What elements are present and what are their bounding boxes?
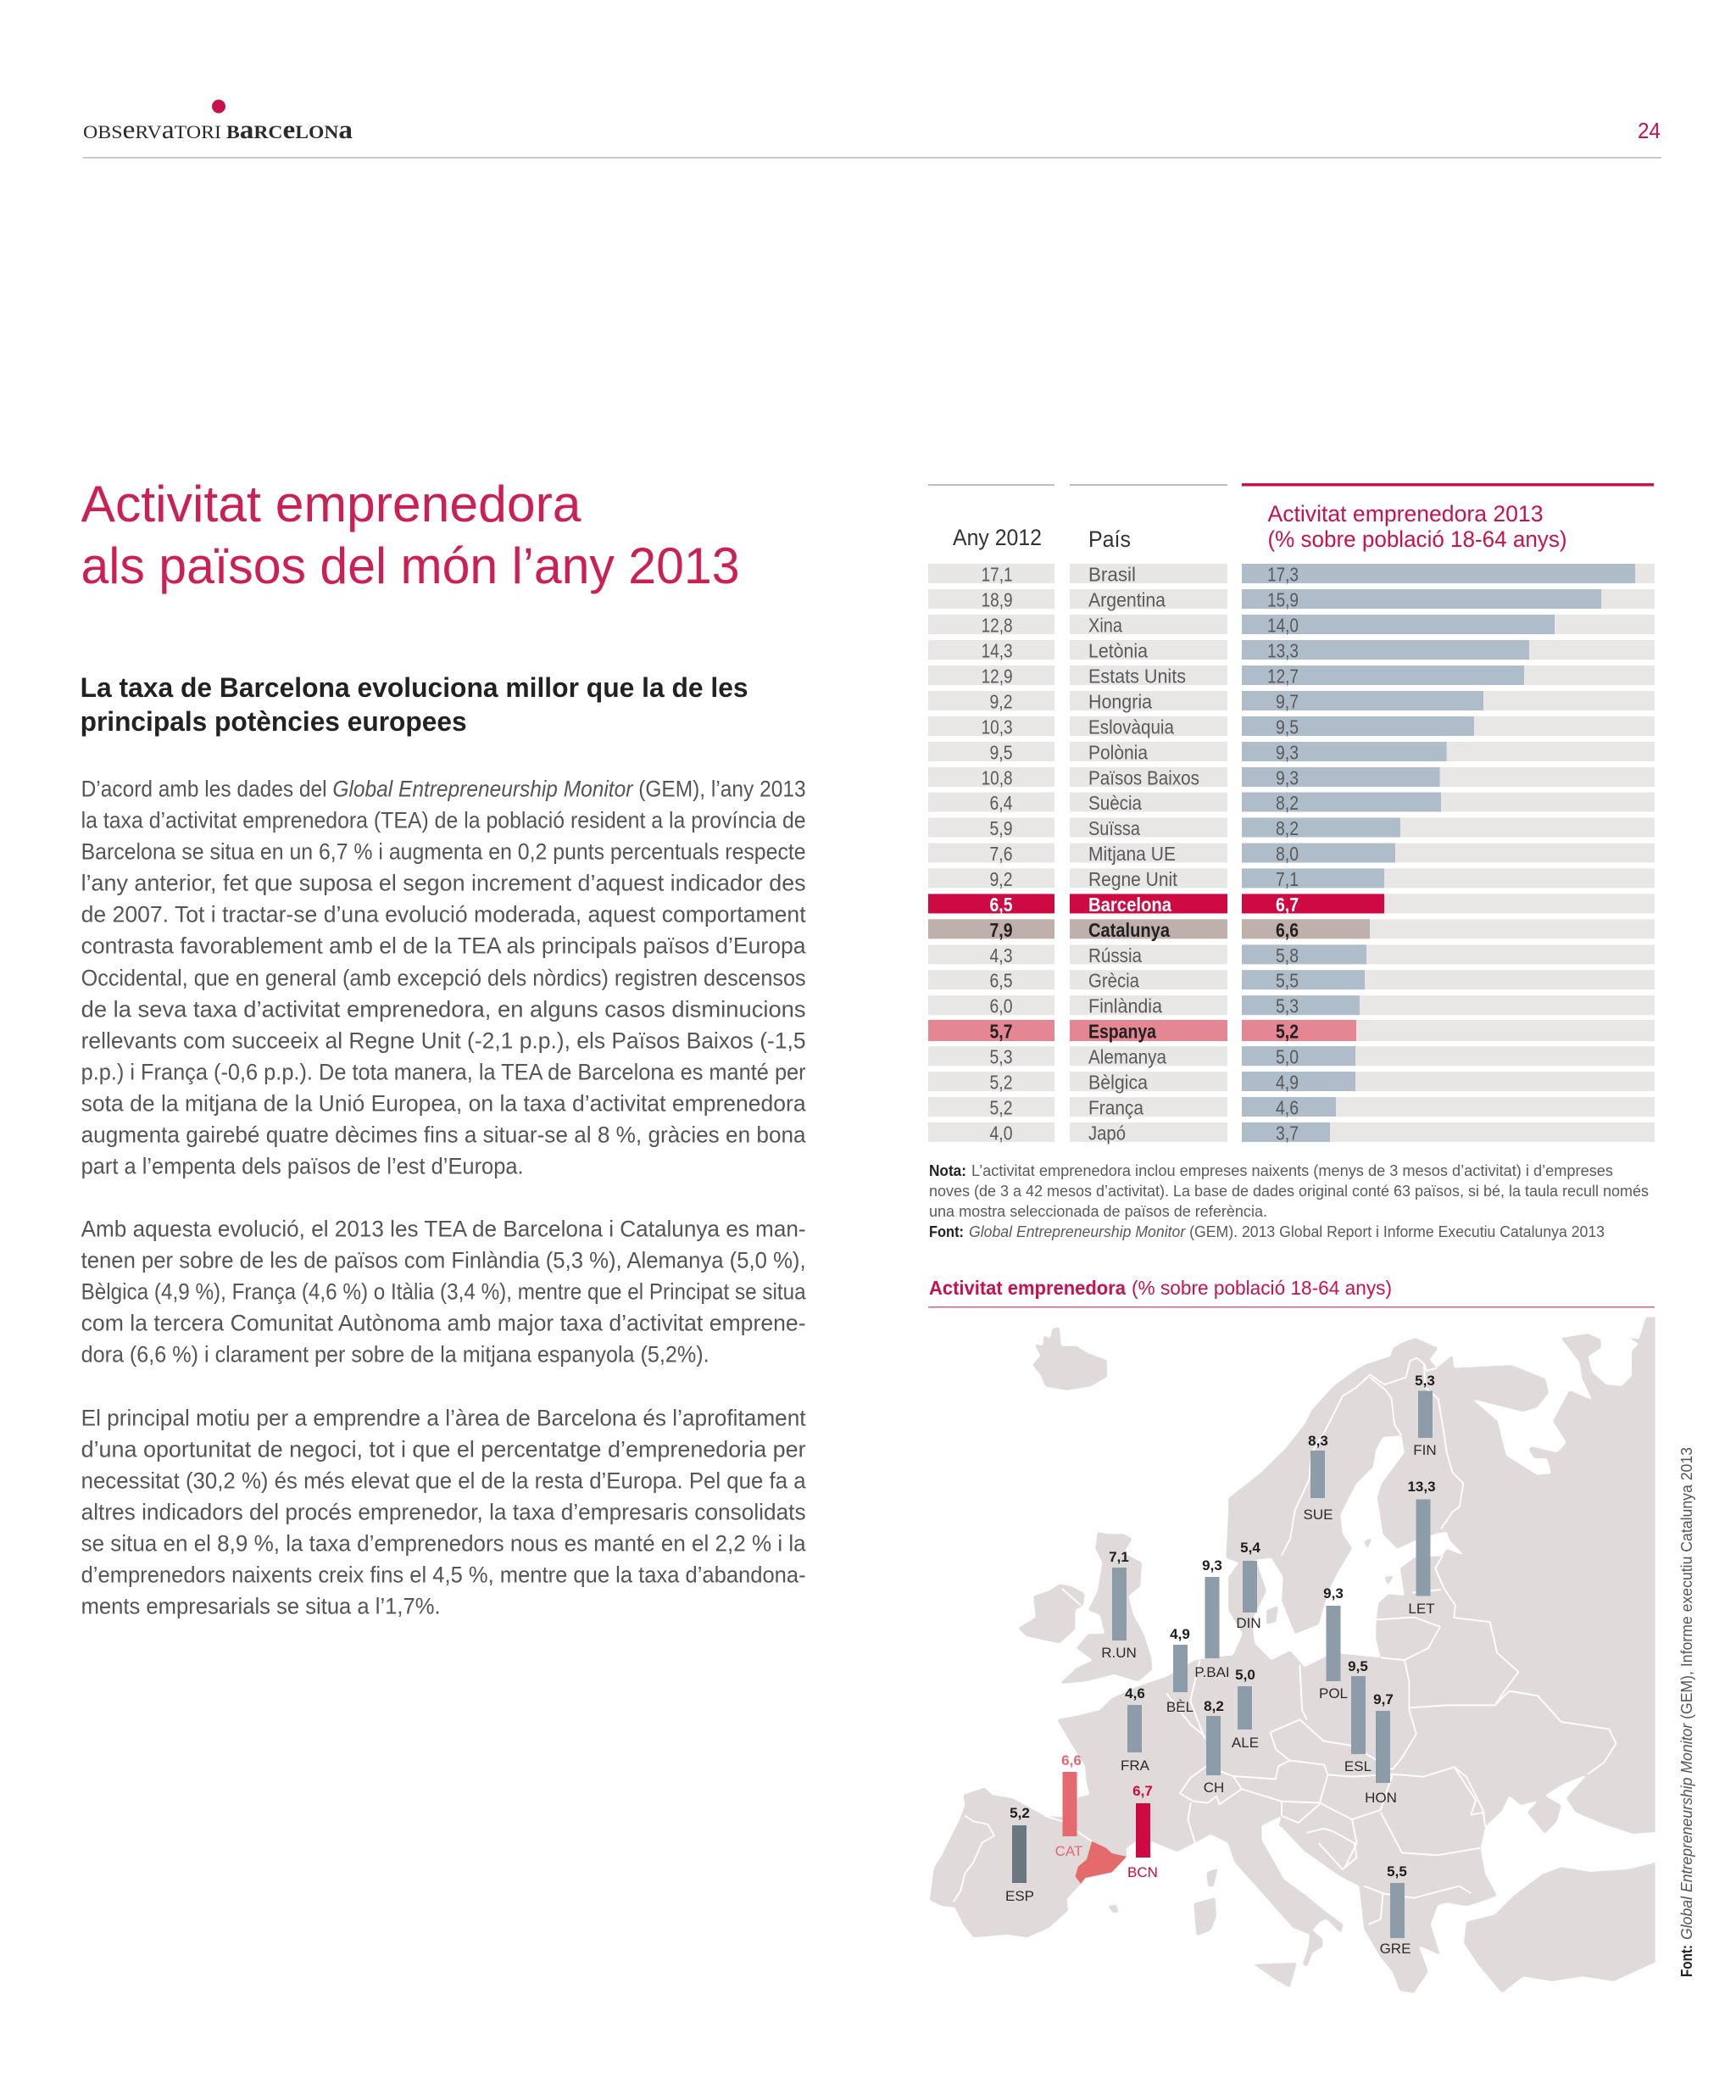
- row: Estats Units: Estats Units: [1088, 665, 1186, 687]
- bar: Espanya: ESP: [1005, 1888, 1034, 1904]
- vertical source note: Font:: [1678, 1945, 1695, 1977]
- bar: França: 4,6: [1125, 1685, 1145, 1702]
- row: Mitjana UE: Mitjana UE: [1088, 843, 1176, 865]
- title: Activitat emprenedora: [81, 476, 581, 532]
- row: Espanya (highlight): [928, 1020, 1655, 1043]
- body text: augmenta gairebé quatre dècimes fins a situar-se al 8 %, gràcies en bona: [81, 1122, 807, 1148]
- row: Alemanya: 5,0: [1276, 1046, 1299, 1068]
- row: Estats Units: 12,9: [982, 665, 1013, 687]
- bar: Dinamarca: DIN: [1236, 1615, 1261, 1631]
- row: Rússia: [928, 944, 1655, 966]
- row: Letònia: 13,3: [1267, 639, 1299, 661]
- logo: Observatori Barcelona: [83, 100, 353, 144]
- body text: se situa en el 8,9 %, la taxa d’emprenedors nous es manté en el 2,2 % i la: [81, 1531, 807, 1557]
- bar: Alemanya: 5,0: [1235, 1667, 1255, 1683]
- bar: Regne Unit: 7,1: [1109, 1549, 1129, 1565]
- row: Xina: 14,0: [1267, 614, 1299, 636]
- bar: Països Baixos: [1194, 1557, 1230, 1680]
- row: Xina: Xina: [1088, 614, 1122, 636]
- bar: Suïssa: [1204, 1698, 1224, 1796]
- row: Països Baixos: [928, 766, 1655, 788]
- bar: Catalunya: [1055, 1752, 1082, 1859]
- row: Suècia: Suècia: [1088, 792, 1142, 814]
- title: [81, 476, 739, 594]
- row: Mitjana UE: [928, 843, 1655, 865]
- bar: Bèlgica: BÈL: [1166, 1699, 1194, 1715]
- bar: Països Baixos: P.BAI: [1194, 1664, 1230, 1680]
- row: Finlàndia: [928, 995, 1655, 1017]
- row: Hongria: 9,2: [990, 690, 1012, 712]
- row: Bèlgica: 4,9: [1276, 1072, 1299, 1094]
- title: als països del món l’any 2013: [81, 538, 739, 594]
- logo: Observatori Barcelona: BaRCeLONa: [226, 114, 353, 144]
- page number: 24: [1638, 118, 1661, 143]
- row: Grècia: 5,5: [1276, 970, 1299, 992]
- row: Estats Units: 12,7: [1267, 665, 1299, 687]
- row: Polònia: Polònia: [1088, 741, 1148, 763]
- subheading: [81, 672, 748, 737]
- row: França: 5,2: [990, 1097, 1012, 1119]
- bar: Hongria: HON: [1365, 1790, 1397, 1806]
- bar: Regne Unit: R.UN: [1101, 1645, 1137, 1661]
- note and source: Font:: [929, 1223, 964, 1240]
- row: Xina: 12,8: [982, 614, 1013, 636]
- row: Barcelona (highlight): 6,7: [1276, 894, 1299, 916]
- bar: Barcelona: [1127, 1783, 1158, 1880]
- bar: Suïssa: CH: [1204, 1780, 1224, 1796]
- row: Països Baixos: 9,3: [1276, 766, 1299, 788]
- body text: la taxa d’activitat emprenedora (TEA) de la població resident a la província de: [81, 807, 806, 833]
- row: Letònia: Letònia: [1088, 639, 1148, 661]
- row: Japó: 3,7: [1276, 1122, 1299, 1144]
- map heading: (% sobre població 18-64 anys): [1132, 1277, 1392, 1299]
- bar: Regne Unit: [1101, 1549, 1137, 1661]
- row: Suïssa: Suïssa: [1088, 817, 1140, 839]
- bar: Letònia: [1407, 1479, 1436, 1617]
- bar: Alemanya: ALE: [1232, 1735, 1259, 1751]
- body text: de 2007. Tot i tractar-se d’una evolució moderada, aquest comportament: [81, 902, 806, 927]
- row: Barcelona (highlight): [928, 894, 1655, 916]
- body text: El principal motiu per a emprendre a l’àrea de Barcelona és l’aprofitament: [81, 1406, 806, 1431]
- bar: Suècia: [1304, 1433, 1333, 1523]
- table: data rows: [928, 563, 1655, 1144]
- row: Mitjana UE: 7,6: [990, 843, 1012, 865]
- row: Espanya (highlight): Espanya: [1088, 1021, 1156, 1043]
- body text: com la tercera Comunitat Autònoma amb major taxa d’activitat emprene-: [81, 1311, 806, 1336]
- row: Finlàndia: 6,0: [990, 995, 1012, 1017]
- row: Finlàndia: 5,3: [1276, 995, 1299, 1017]
- row: Japó: Japó: [1088, 1122, 1126, 1144]
- bar: França: FRA: [1121, 1757, 1150, 1774]
- row: Brasil: Brasil: [1088, 563, 1136, 585]
- map heading: [928, 1277, 1655, 1307]
- bar: Finlàndia: 5,3: [1415, 1373, 1435, 1389]
- bar: Letònia: LET: [1408, 1601, 1435, 1617]
- row: Suècia: 6,4: [990, 792, 1013, 814]
- table headers: País: [1088, 526, 1131, 552]
- row: Catalunya (highlight): 7,9: [990, 919, 1012, 941]
- subheading: principals potències europees: [81, 706, 467, 737]
- body text: d’emprenedors naixents creix fins el 4,5 %, mentre que la taxa d’abandona-: [81, 1562, 806, 1587]
- row: Japó: 4,0: [990, 1122, 1012, 1144]
- logo: Observatori Barcelona: OBSeRVaTORI: [83, 114, 221, 144]
- body text: Barcelona se situa en un 6,7 % i augmenta en 0,2 punts percentuals respecte: [81, 839, 806, 865]
- bar: Eslovàquia: ESL: [1344, 1758, 1372, 1774]
- bar: Bèlgica: 4,9: [1170, 1626, 1190, 1642]
- row: Regne Unit: 7,1: [1276, 868, 1299, 890]
- row: Brasil: 17,1: [982, 563, 1013, 585]
- bar: Catalunya: CAT: [1055, 1843, 1082, 1859]
- bar: França: [1121, 1685, 1150, 1774]
- body text: l’any anterior, fet que suposa el segon increment d’aquest indicador des: [81, 870, 806, 895]
- row: Suècia: 8,2: [1276, 792, 1299, 814]
- row: Polònia: 9,5: [990, 741, 1012, 763]
- body text: tenen per sobre de les de països com Finlàndia (5,3 %), Alemanya (5,0 %),: [81, 1248, 806, 1273]
- body text: rellevants com succeeix al Regne Unit (-2,1 p.p.), els Països Baixos (-1,5: [81, 1028, 806, 1053]
- row: Alemanya: [928, 1046, 1655, 1068]
- body text: Bèlgica (4,9 %), França (4,6 %) o Itàlia (3,4 %), mentre que el Principat se situa: [81, 1278, 806, 1304]
- body text: p.p.) i França (-0,6 p.p.). De tota manera, la TEA de Barcelona es manté per: [81, 1060, 806, 1085]
- bar: Finlàndia: [1413, 1373, 1437, 1458]
- row: Bèlgica: 5,2: [990, 1072, 1012, 1094]
- note and source: una mostra seleccionada de països de referència.: [929, 1203, 1267, 1220]
- row: Regne Unit: 9,2: [990, 868, 1012, 890]
- body text: Amb aquesta evolució, el 2013 les TEA de Barcelona i Catalunya es man-: [81, 1216, 806, 1241]
- row: Grècia: Grècia: [1088, 970, 1139, 992]
- row: Eslovàquia: 10,3: [982, 716, 1013, 738]
- row: Japó: [928, 1122, 1655, 1144]
- bar: Eslovàquia: 9,5: [1348, 1658, 1368, 1674]
- row: Espanya (highlight): 5,7: [990, 1021, 1012, 1043]
- bar: Hongria: 9,7: [1373, 1691, 1394, 1707]
- row: Polònia: [928, 741, 1655, 763]
- body text: part a l’empenta dels països de l’est d’Europa.: [81, 1153, 524, 1178]
- body text: altres indicadors del procés emprenedor, la taxa d’empresaris consolidats: [81, 1499, 806, 1524]
- bar: Bèlgica: [1166, 1626, 1194, 1715]
- row: Letònia: 14,3: [982, 639, 1013, 661]
- body text: de la seva taxa d’activitat emprenedora, en alguns casos disminucions: [81, 997, 806, 1022]
- row: Xina: [928, 614, 1655, 636]
- bar: Barcelona: BCN: [1127, 1864, 1158, 1880]
- bar: Barcelona: 6,7: [1132, 1783, 1153, 1799]
- row: Barcelona (highlight): Barcelona: [1088, 894, 1171, 916]
- bar: Suïssa: 8,2: [1204, 1698, 1224, 1714]
- map region: Catalonia: [1075, 1841, 1127, 1884]
- row: Rússia: Rússia: [1088, 944, 1142, 966]
- body text: necessitat (30,2 %) és més elevat que el de la resta d’Europa. Pel que fa a: [81, 1468, 807, 1494]
- note and source: noves (de 3 a 42 mesos d’activitat). La base de dades original conté 63 països, si bé, la taula recull només: [929, 1183, 1649, 1200]
- body text: [81, 777, 807, 1619]
- row: Grècia: [928, 970, 1655, 992]
- bar: Grècia: GRE: [1380, 1941, 1410, 1957]
- row: Suècia: [928, 792, 1655, 814]
- bar: Espanya: [1005, 1805, 1034, 1904]
- bar: Grècia: 5,5: [1387, 1863, 1407, 1880]
- row: Argentina: 15,9: [1267, 588, 1299, 610]
- note and source: Global Entrepreneurship Monitor (GEM). 2013 Global Report i Informe Executiu Catalunya 2013: [969, 1223, 1605, 1240]
- row: Suïssa: 8,2: [1276, 817, 1299, 839]
- row: Països Baixos: Països Baixos: [1088, 766, 1199, 788]
- row: Espanya (highlight): 5,2: [1276, 1021, 1299, 1043]
- subheading: La taxa de Barcelona evoluciona millor que la de les: [81, 672, 748, 703]
- row: Grècia: 6,5: [990, 970, 1012, 992]
- row: França: França: [1088, 1097, 1143, 1119]
- bar: Hongria: [1365, 1691, 1397, 1806]
- row: Argentina: Argentina: [1088, 588, 1166, 610]
- row: Brasil: 17,3: [1267, 563, 1299, 585]
- bar: Suècia: SUE: [1304, 1507, 1333, 1523]
- bar: Dinamarca: [1236, 1540, 1261, 1631]
- row: Catalunya (highlight): [928, 919, 1655, 941]
- vertical source note: Global Entrepreneurship Monitor (GEM), Informe executiu Catalunya 2013: [1678, 1447, 1695, 1940]
- row: Bèlgica: [928, 1072, 1655, 1094]
- body text: d’una oportunitat de negoci, tot i que el percentatge d’emprenedoria per: [81, 1436, 806, 1462]
- bar: Dinamarca: 5,4: [1240, 1540, 1260, 1556]
- row: Alemanya: Alemanya: [1088, 1046, 1166, 1068]
- row: Bèlgica: Bèlgica: [1088, 1072, 1148, 1094]
- row: Brasil: [928, 563, 1655, 585]
- row: Hongria: Hongria: [1088, 690, 1152, 712]
- table headers: Activitat emprenedora 2013: [1268, 501, 1543, 526]
- row: Eslovàquia: 9,5: [1276, 716, 1299, 738]
- row: Eslovàquia: [928, 716, 1655, 738]
- bar: Polònia: [1319, 1585, 1348, 1702]
- row: Catalunya (highlight): Catalunya: [1088, 919, 1170, 941]
- row: Rússia: 5,8: [1276, 944, 1299, 966]
- row: Barcelona (highlight): 6,5: [990, 894, 1013, 916]
- row: Països Baixos: 10,8: [982, 766, 1013, 788]
- row: Suïssa: [928, 817, 1655, 839]
- row: Letònia: [928, 639, 1655, 661]
- row: Argentina: 18,9: [982, 588, 1013, 610]
- note and source: Nota:: [929, 1162, 966, 1179]
- bar: Letònia: 13,3: [1407, 1479, 1436, 1495]
- row: Alemanya: 5,3: [990, 1046, 1012, 1068]
- note and source: [929, 1162, 1649, 1240]
- bar: Grècia: [1380, 1863, 1410, 1957]
- bar: Polònia: 9,3: [1323, 1585, 1344, 1601]
- body text: D’acord amb les dades del Global Entrepreneurship Monitor (GEM), l’any 2013: [81, 777, 806, 802]
- row: França: 4,6: [1276, 1097, 1299, 1119]
- body text: sota de la mitjana de la Unió Europea, on la taxa d’activitat emprenedora: [81, 1090, 807, 1116]
- row: Estats Units: [928, 665, 1655, 687]
- map of Europe: [930, 1317, 1666, 1993]
- row: Argentina: [928, 588, 1655, 610]
- bar: Polònia: POL: [1319, 1685, 1348, 1702]
- row: Catalunya (highlight): 6,6: [1276, 919, 1299, 941]
- bar: Finlàndia: FIN: [1413, 1442, 1437, 1458]
- row: Polònia: 9,3: [1276, 741, 1299, 763]
- bar: Eslovàquia: [1344, 1658, 1372, 1774]
- table headers: [928, 483, 1654, 552]
- body text: ments empresarials se situa a l’1,7%.: [81, 1594, 441, 1619]
- row: Rússia: 4,3: [990, 944, 1012, 966]
- row: Mitjana UE: 8,0: [1276, 843, 1299, 865]
- body text: Occidental, que en general (amb excepció dels nòrdics) registren descensos: [81, 965, 806, 990]
- row: Hongria: [928, 690, 1655, 712]
- bar: Alemanya: [1232, 1667, 1259, 1751]
- body text: contrasta favorablement amb el de la TEA als principals països d’Europa: [81, 933, 807, 958]
- bar: Suècia: 8,3: [1308, 1433, 1328, 1449]
- row: Regne Unit: [928, 868, 1655, 890]
- row: Eslovàquia: Eslovàquia: [1088, 716, 1174, 738]
- body text: dora (6,6 %) i clarament per sobre de la mitjana espanyola (5,2%).: [81, 1341, 709, 1367]
- row: Hongria: 9,7: [1276, 690, 1299, 712]
- bar: Catalunya: 6,6: [1061, 1752, 1082, 1769]
- row: Suïssa: 5,9: [990, 817, 1012, 839]
- bar: Espanya: 5,2: [1010, 1805, 1030, 1821]
- table headers: (% sobre població 18-64 anys): [1268, 526, 1566, 552]
- bar: Països Baixos: 9,3: [1202, 1557, 1222, 1574]
- row: França: [928, 1097, 1655, 1119]
- row: Regne Unit: Regne Unit: [1088, 868, 1178, 890]
- row: Finlàndia: Finlàndia: [1088, 995, 1162, 1017]
- map heading: Activitat emprenedora: [929, 1277, 1126, 1299]
- note and source: L’activitat emprenedora inclou empreses naixents (menys de 3 mesos d’activitat) i d’empreses: [971, 1162, 1613, 1179]
- table headers: Any 2012: [953, 525, 1042, 550]
